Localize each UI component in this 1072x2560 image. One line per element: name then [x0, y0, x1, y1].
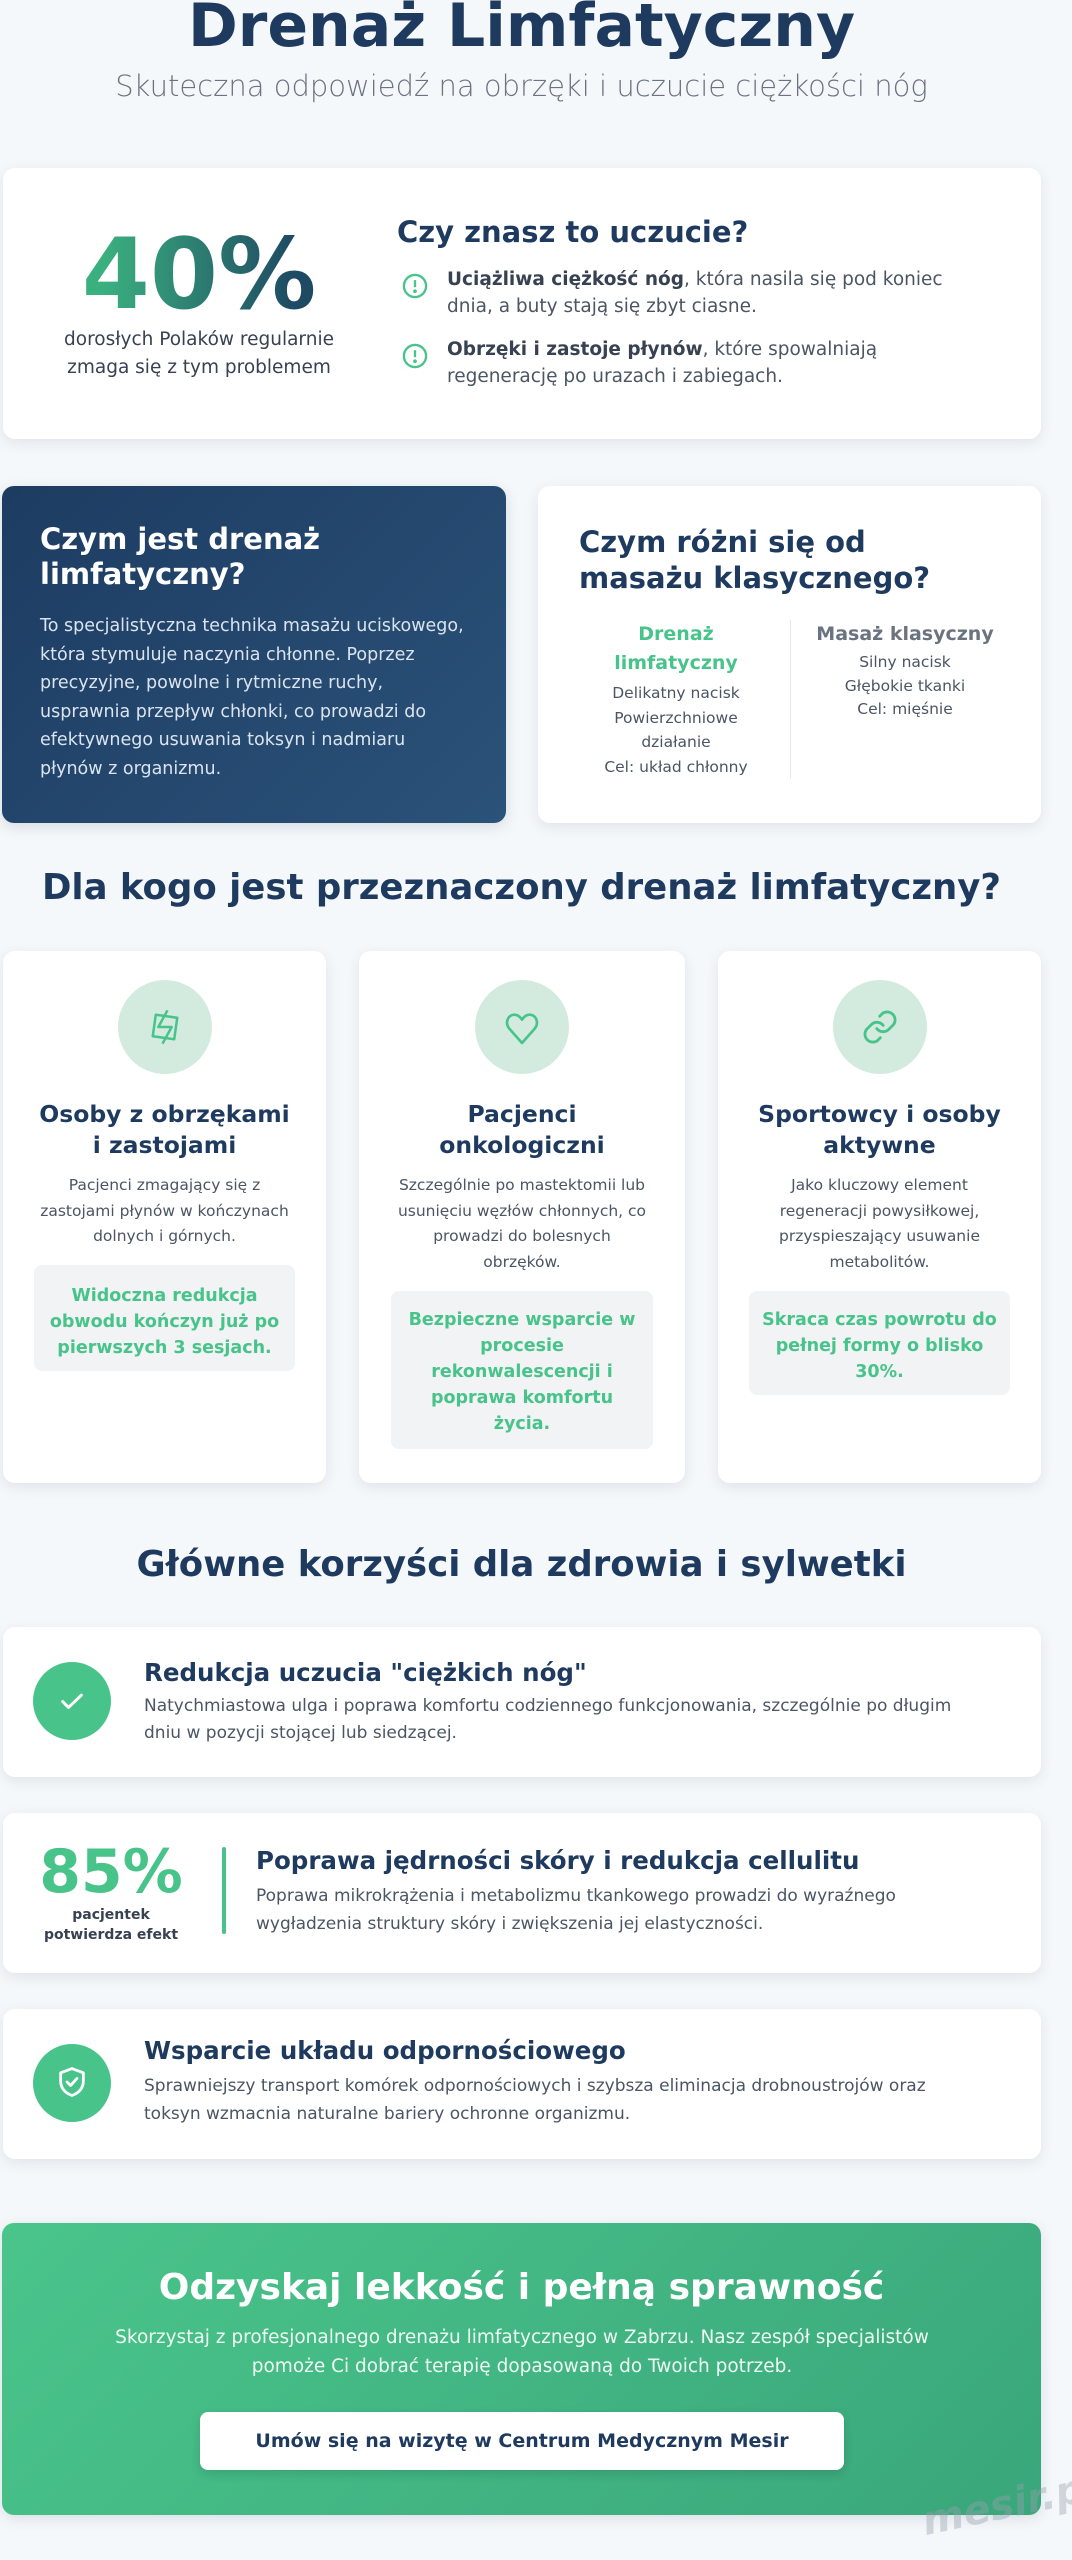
description: To specjalistyczna technika masażu uciskowego, która stymuluje naczynia chłonne. Poprzez precyzyjne, powolne i rytmiczne ruchy, usprawnia przepływ chłonki, co prowadzi do efektywnego usuwania toksyn i nadmiaru płynów z organizmu. [40, 616, 464, 779]
heading: Czym różni się od masażu klasycznego? [579, 525, 930, 595]
panel: group 2 [359, 951, 685, 1483]
icon: check [33, 1662, 111, 1740]
description: Szczególnie po mastektomii lub usunięciu węzłów chłonnych, co prowadzi do bolesnych obrzęków. [398, 1176, 646, 1270]
highlight [391, 1291, 653, 1449]
column: lymphatic drainage: Delikatny nacisk [612, 684, 740, 702]
panel: benefit 2 [3, 1813, 1041, 1973]
column: classic massage: Głębokie tkanki [845, 676, 965, 694]
heading: target groups: Dla kogo jest przeznaczony drenaż limfatyczny? [42, 867, 1001, 908]
panel: benefit 1 [3, 1627, 1041, 1777]
panel: statistic and symptoms [3, 168, 1041, 439]
column: classic massage: Cel: mięśnie [857, 700, 953, 718]
panel: what is lymphatic drainage [2, 486, 506, 823]
column: lymphatic drainage: Powierzchniowe działanie [614, 708, 738, 751]
column: lymphatic drainage: Cel: układ chłonny [604, 758, 748, 776]
heading: benefits: Główne korzyści dla zdrowia i sylwetki [136, 1544, 906, 1585]
symptom 2: Obrzęki i zastoje płynów, które spowalniają regenerację po urazach i zabiegach. [447, 339, 877, 387]
column: classic massage [816, 623, 994, 718]
icon: swelling [118, 980, 212, 1074]
icon: heart [475, 980, 569, 1074]
column: lymphatic drainage: Drenaż limfatyczny [614, 623, 738, 674]
panel: call to action [2, 2223, 1041, 2515]
CTA button: Umów się na wizytę w Centrum Medycznym Mesir [255, 2430, 789, 2452]
CTA text: Skorzystaj z profesjonalnego drenażu limfatycznego w Zabrzu. Nasz zespół specjalistów pomoże Ci dobrać terapię dopasowaną do Twoich potrzeb. [115, 2327, 929, 2377]
stat 85%: pacjentek [72, 1907, 150, 1923]
column: lymphatic drainage [604, 623, 748, 776]
highlight [749, 1291, 1010, 1395]
description: Natychmiastowa ulga i poprawa komfortu codziennego funkcjonowania, szczególnie po długim dniu w pozycji stojącej lub siedzącej. [144, 1696, 951, 1743]
icon: alert [402, 344, 428, 368]
panel: group 3 [718, 951, 1041, 1483]
big stat 40%: 40% [82, 218, 316, 332]
icon: shield [33, 2044, 111, 2122]
icon: alert [402, 274, 428, 298]
highlight: Widoczna redukcja obwodu kończyn już po pierwszych 3 sesjach. [50, 1286, 279, 1358]
highlight: Bezpieczne wsparcie w procesie rekonwalescencji i poprawa komfortu życia. [409, 1310, 635, 1434]
CTA heading: Odzyskaj lekkość i pełną sprawność [159, 2267, 884, 2308]
title: Wsparcie układu odpornościowego [144, 2036, 626, 2065]
symptom 1: Uciążliwa ciężkość nóg, która nasila się pod koniec dnia, a buty stają się zbyt ciasne. [447, 269, 943, 317]
panel: group 1 [3, 951, 326, 1483]
description: Pacjenci zmagający się z zastojami płynów w kończynach dolnych i górnych. [40, 1176, 289, 1245]
stat 85%: 85% [39, 1837, 183, 1907]
title: Redukcja uczucia "ciężkich nóg" [144, 1658, 587, 1687]
description: Poprawa mikrokrążenia i metabolizmu tkankowego prowadzi do wyraźnego wygładzenia struktury skóry i zwiększenia jej elastyczności. [256, 1886, 896, 1934]
heading: symptoms: Czy znasz to uczucie? [397, 215, 748, 249]
heading: Czym jest drenaż limfatyczny? [40, 522, 320, 591]
description: Jako kluczowy element regeneracji powysiłkowej, przyspieszający usuwanie metabolitów. [779, 1176, 980, 1270]
column: classic massage: Silny nacisk [859, 653, 951, 671]
title: Osoby z obrzękami i zastojami [39, 1100, 290, 1159]
CTA button [200, 2412, 844, 2470]
stat 85% [39, 1837, 183, 1943]
stat 85%: potwierdza efekt [44, 1927, 178, 1943]
title: Sportowcy i osoby aktywne [758, 1100, 1001, 1159]
panel: benefit 3 [3, 2009, 1041, 2159]
highlight: Skraca czas powrotu do pełnej formy o blisko 30%. [762, 1310, 997, 1382]
title: Poprawa jędrności skóry i redukcja cellulitu [256, 1846, 859, 1875]
subtitle: Skuteczna odpowiedź na obrzęki i uczucie ciężkości nóg [115, 69, 928, 103]
stat caption: dorosłych Polaków regularnie zmaga się z tym problemem [64, 329, 334, 378]
highlight [34, 1265, 295, 1371]
column: classic massage: Masaż klasyczny [816, 623, 994, 645]
description: Sprawniejszy transport komórek odpornościowych i szybsza eliminacja drobnoustrojów oraz toksyn wzmacnia naturalne bariery ochronne organizmu. [144, 2076, 926, 2124]
panel: comparison with classic massage [538, 486, 1041, 823]
title: Pacjenci onkologiczni [439, 1100, 605, 1159]
icon: link [833, 980, 927, 1074]
